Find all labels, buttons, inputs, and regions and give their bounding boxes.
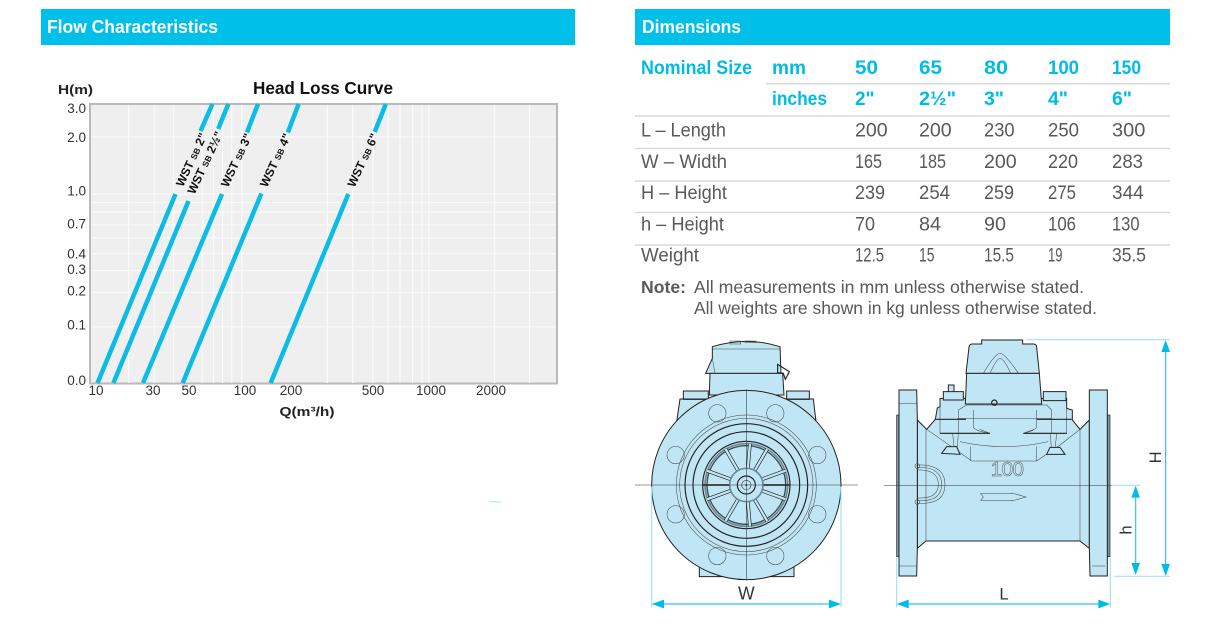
curve labels: WST SB 3"	[218, 131, 255, 189]
row: length: 230	[984, 120, 1015, 142]
row: weight: 15.5	[984, 246, 1014, 266]
row: length	[641, 120, 1145, 142]
row: h height: 106	[1048, 214, 1076, 236]
header row: inches: inches	[772, 89, 827, 110]
row: h height: 90	[984, 214, 1006, 236]
y axis labels: 3.0	[67, 101, 86, 116]
x axis labels: 2000	[476, 383, 506, 398]
x axis title: Q(m³/h)	[280, 404, 334, 419]
register neck	[965, 373, 1042, 404]
row: width	[641, 152, 1143, 173]
note: All measurements in mm unless otherwise stated.	[694, 277, 1084, 297]
lower belly and feet	[927, 429, 1080, 461]
row: weight: Weight	[641, 246, 700, 266]
impeller wheel	[703, 444, 790, 526]
row: h height: 70	[855, 214, 875, 236]
row: h height: h – Height	[641, 214, 725, 236]
side latch	[778, 364, 789, 379]
row: weight	[641, 246, 1146, 266]
plot area	[90, 104, 557, 384]
y axis labels: 0.1	[67, 318, 86, 332]
right flange	[1089, 390, 1110, 576]
y axis labels: 0.0	[67, 373, 86, 388]
row: weight: 15	[919, 246, 934, 266]
dimension L	[897, 558, 1110, 608]
row: width: 283	[1112, 152, 1143, 173]
x axis labels: 200	[280, 383, 302, 398]
centre line	[884, 484, 1112, 486]
header row: mm: 80	[984, 58, 1008, 79]
concentric bore rings	[676, 415, 816, 555]
chart: head loss curve	[58, 78, 557, 419]
x axis labels: 10	[88, 383, 104, 398]
row: h height	[641, 214, 1140, 236]
row: width: W – Width	[641, 152, 727, 173]
curve: WST SB 2 inch	[98, 104, 212, 383]
y axis labels: 2.0	[67, 130, 86, 145]
header row: mm: 150	[1112, 58, 1141, 79]
inspection arc	[917, 465, 945, 503]
header row: mm: 100	[1048, 58, 1079, 79]
curve: WST SB 3 inch	[143, 104, 258, 383]
note: Note:	[641, 277, 686, 297]
meter head	[966, 340, 1039, 373]
bolt holes	[667, 405, 826, 565]
dimension W	[652, 487, 841, 608]
row: length: 200	[855, 120, 888, 142]
side bolts	[677, 391, 816, 422]
dimension W: W	[738, 582, 755, 603]
diagram: meter side view	[884, 340, 1170, 608]
header row: inches: 4"	[1048, 89, 1068, 110]
row: length: 250	[1048, 120, 1079, 142]
head cap details	[712, 341, 780, 373]
row: H height: 275	[1048, 183, 1076, 204]
table rules	[635, 84, 1170, 245]
x axis labels: 500	[362, 383, 384, 398]
y axis labels	[67, 101, 86, 388]
logo arch	[983, 353, 1018, 373]
meter neck	[709, 373, 784, 395]
row: H height: 259	[984, 183, 1014, 204]
flange disc	[652, 390, 841, 580]
base foot	[699, 560, 794, 577]
curve labels: WST SB 2½"	[185, 129, 226, 196]
y axis title: H(m)	[58, 82, 93, 97]
dimensions table	[635, 58, 1170, 266]
row: h height: 130	[1112, 214, 1140, 236]
left bolt	[943, 385, 963, 400]
dimension L: L	[999, 584, 1009, 603]
header row: inches: 6"	[1112, 89, 1132, 110]
panel header: flow characteristics	[41, 9, 575, 45]
panel header: dimensions	[635, 9, 1170, 45]
dimension H	[1027, 340, 1170, 576]
right bolt	[1043, 392, 1066, 401]
row: width: 200	[984, 152, 1017, 173]
row: width: 185	[919, 152, 946, 173]
row: length: 200	[919, 120, 952, 142]
row: width: 220	[1048, 152, 1078, 173]
row: length: 300	[1112, 120, 1145, 142]
row: H height: 344	[1112, 183, 1144, 204]
curve: WST SB 6 inch	[271, 104, 386, 383]
meter head	[706, 341, 781, 373]
y axis labels: 0.7	[67, 216, 86, 232]
panel header: dimensions: Dimensions	[642, 17, 741, 37]
row: H height	[641, 183, 1144, 204]
header row: mm: 65	[919, 58, 942, 79]
header row: inches: 2½"	[919, 89, 956, 110]
y axis labels: 1.0	[67, 184, 86, 198]
y axis labels: 0.4	[67, 246, 86, 262]
curve labels: WST SB 4"	[257, 131, 294, 189]
curve: WST SB 2 1/2 inch	[113, 104, 228, 383]
curve labels: WST SB 6"	[345, 131, 382, 189]
y axis labels: 0.3	[67, 262, 86, 277]
curve: WST SB 4 inch	[183, 104, 299, 383]
y axis labels: 0.2	[67, 284, 86, 298]
x axis labels: 100	[234, 383, 256, 398]
curve labels	[173, 129, 382, 196]
header row: mm: 50	[855, 58, 878, 79]
dimension h	[1112, 485, 1140, 575]
size marking 100: 100	[991, 458, 1024, 481]
x axis labels	[88, 383, 506, 398]
flow arrow	[981, 493, 1026, 501]
header row: inches: 2"	[855, 89, 874, 110]
header row: inches: 3"	[984, 89, 1004, 110]
header row: mm	[641, 58, 1141, 79]
x axis labels: 1000	[416, 383, 446, 398]
row: h height: 84	[919, 214, 941, 236]
pipe body and collar silhouette	[917, 398, 1089, 548]
row: H height: 239	[855, 183, 885, 204]
stray mark	[489, 501, 501, 502]
diagram: meter front view	[635, 341, 858, 608]
left flange	[897, 390, 917, 576]
clamp collar	[935, 400, 1072, 433]
row: width: 165	[855, 152, 882, 173]
curve labels: WST SB 2"	[173, 131, 210, 189]
row: H height: H – Height	[641, 183, 728, 204]
row: length: L – Length	[641, 120, 726, 142]
row: weight: 19	[1048, 246, 1062, 266]
header row: inches	[772, 89, 1132, 110]
centre lines	[635, 389, 858, 581]
x axis labels: 50	[181, 383, 197, 398]
note: All weights are shown in kg unless otherwise stated.	[694, 298, 1097, 318]
row: H height: 254	[919, 183, 950, 204]
chart title: Head Loss Curve	[253, 78, 393, 98]
dimension h: h	[1117, 525, 1136, 535]
header row: mm: mm	[772, 58, 806, 79]
row: weight: 35.5	[1112, 246, 1146, 266]
header row: mm: Nominal Size	[641, 58, 752, 79]
row: weight: 12.5	[855, 246, 884, 266]
x axis labels: 30	[145, 383, 161, 398]
note	[641, 277, 1097, 318]
panel header: flow characteristics: Flow Characteristics	[47, 17, 218, 37]
dimension H: H	[1146, 451, 1165, 463]
